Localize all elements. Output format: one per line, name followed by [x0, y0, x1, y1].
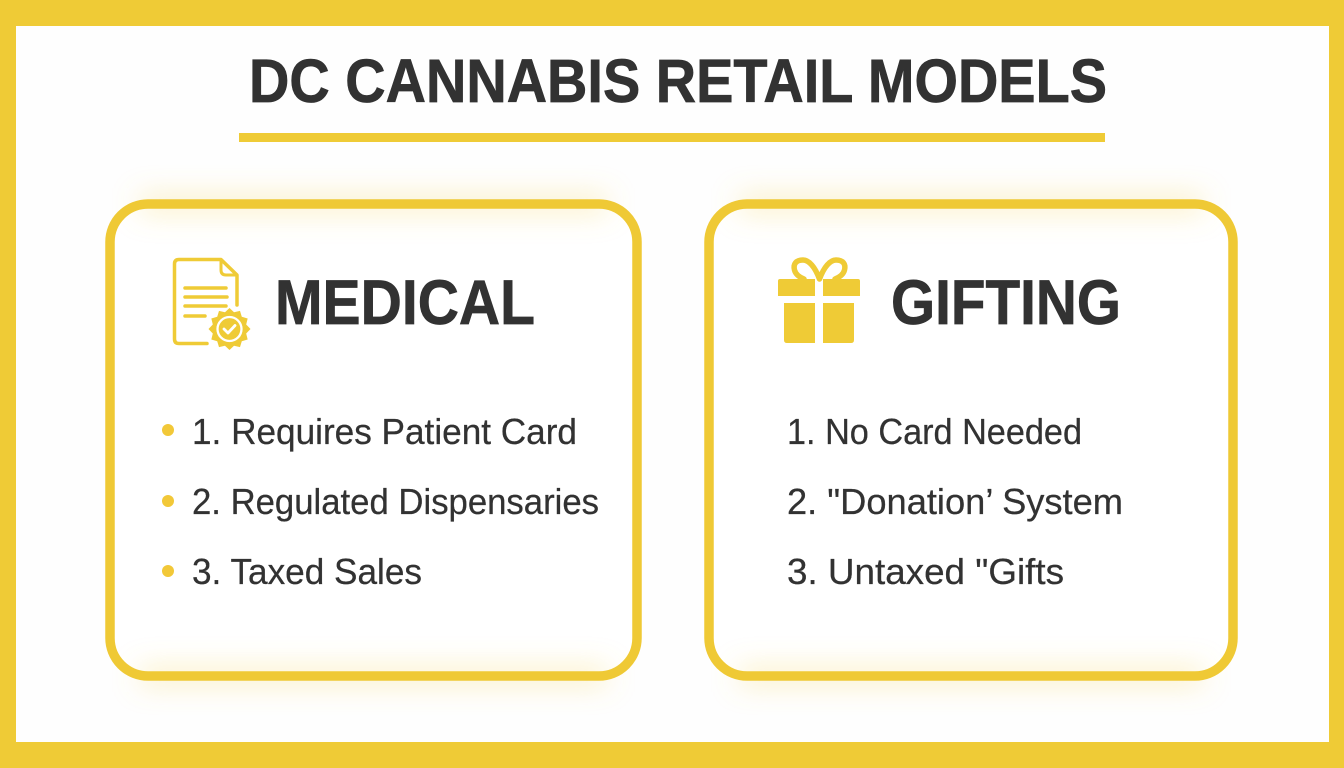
title: DC CANNABIS RETAIL MODELS: [249, 47, 1107, 115]
item 2: 2. "Donation’ System: [787, 481, 1123, 522]
item 3: 3. Taxed Sales: [192, 551, 422, 592]
panel: medical: [110, 204, 637, 676]
item 3: 3. Untaxed "Gifts: [787, 551, 1064, 592]
heading: medical: MEDICAL: [275, 268, 535, 338]
panel: gifting: [709, 204, 1233, 676]
card outline: medical: [110, 204, 637, 676]
bullet 1: [162, 424, 174, 436]
item 1: 1. Requires Patient Card: [192, 411, 577, 452]
list: medical: [162, 411, 599, 592]
item 2: 2. Regulated Dispensaries: [192, 481, 599, 522]
icon: certified document: [174, 260, 250, 350]
bullet 2: [162, 495, 174, 507]
bullet 3: [162, 565, 174, 577]
item 1: 1. No Card Needed: [787, 411, 1082, 452]
card outline: gifting: [709, 204, 1233, 676]
icon: gift box: [778, 260, 860, 343]
heading: gifting: GIFTING: [891, 268, 1121, 338]
title underline: [239, 133, 1105, 142]
list: gifting: [787, 411, 1123, 592]
